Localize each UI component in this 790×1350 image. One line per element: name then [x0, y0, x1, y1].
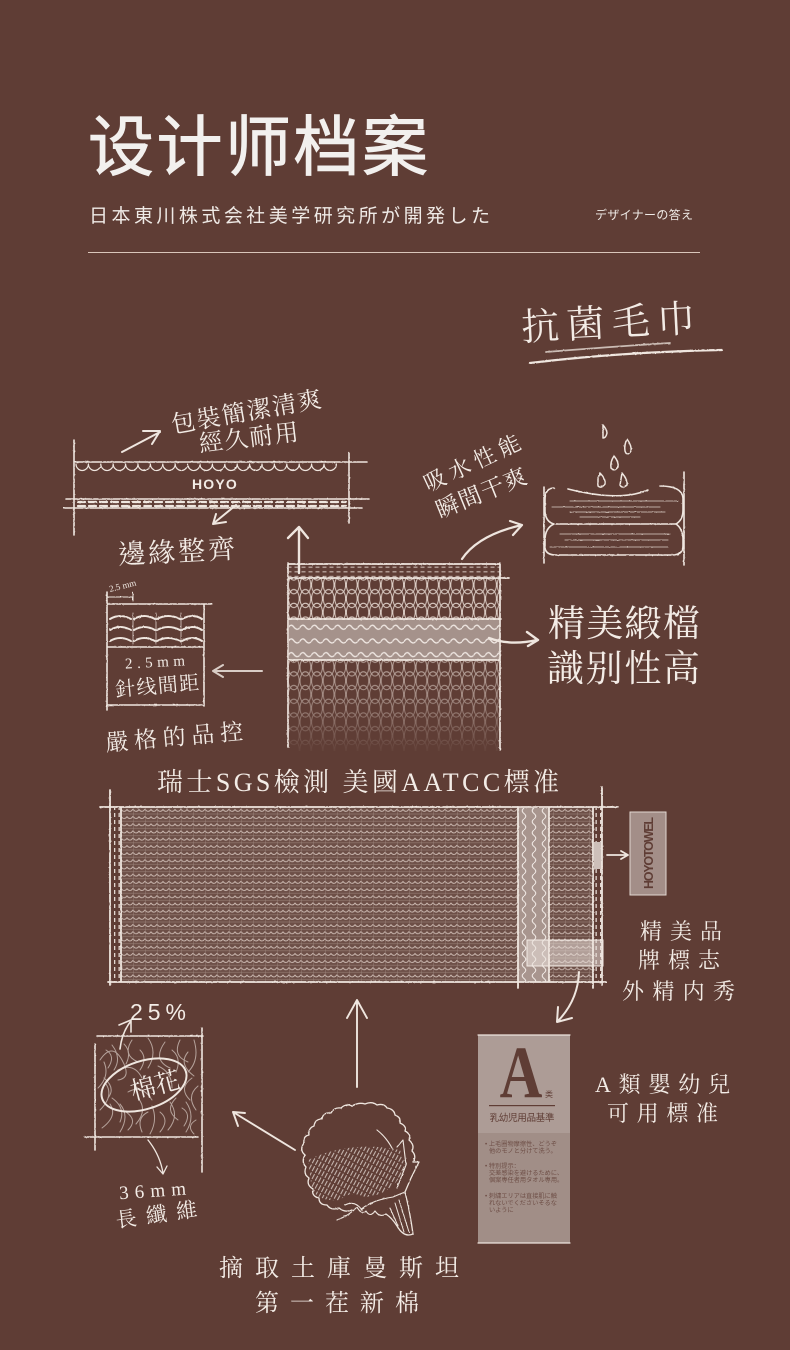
underline swoosh	[530, 343, 722, 363]
panel: stitch spacing	[107, 578, 212, 710]
text: class A note: 可用標准	[607, 1101, 718, 1126]
card notes: れないでくださいそるな	[489, 1200, 557, 1207]
boll outline	[302, 1103, 419, 1235]
text: absorbency note: 瞬間干爽	[432, 464, 531, 523]
arrow: up to strip	[288, 527, 308, 573]
text: packaging note: 包裝簡潔清爽	[169, 386, 324, 439]
arrow: to fibre length	[148, 1140, 167, 1174]
card notes: • 上毛圈物摩擦性、どうぞ	[485, 1140, 557, 1148]
arrow: to packaging note	[122, 431, 160, 452]
towel outlines	[288, 563, 509, 750]
arrow: to absorbency	[462, 521, 522, 559]
heading: antibacterial towel	[520, 298, 722, 363]
woven band	[289, 620, 500, 660]
arrow: to stitch box	[213, 665, 262, 677]
card notes: 個案専任者用タオル専用。	[489, 1176, 563, 1184]
text: brand note: 精美品	[640, 919, 722, 944]
card notes	[485, 1140, 563, 1214]
arrow: to 25%	[119, 1020, 131, 1049]
text: class A note	[595, 1072, 730, 1126]
text: fibre length	[114, 1179, 199, 1233]
band of dots	[289, 565, 500, 578]
panel: packaging strip	[64, 440, 369, 535]
card lower	[478, 1133, 570, 1243]
text: woven band note: 識别性高	[547, 648, 700, 690]
strip drawing	[64, 440, 369, 535]
text: packaging note: 經久耐用	[198, 419, 300, 458]
card notes: • 特別提示：	[485, 1162, 520, 1170]
text: fibre length: 長纖維	[114, 1197, 199, 1233]
arrow: to woven band note	[489, 632, 538, 646]
text: quality control: 嚴格的品控	[104, 719, 244, 756]
text: 25%: 25%	[130, 999, 186, 1025]
text: woven band note	[547, 603, 700, 690]
text: woven band note: 精美緞檔	[548, 603, 700, 645]
cotton label: 棉花	[127, 1066, 183, 1106]
card upper	[478, 1035, 570, 1133]
panel: towel close-up	[288, 563, 509, 751]
water drops	[598, 425, 631, 487]
towel body	[121, 808, 518, 982]
tag: HOYOTOWEL	[630, 812, 666, 895]
outlines	[100, 787, 618, 988]
heading: antibacterial towel: 抗菌毛巾	[520, 298, 696, 350]
text: cotton origin: 第一茬新棉	[255, 1290, 419, 1317]
text: cotton origin	[219, 1255, 459, 1317]
subtitle: 日本東川株式会社美学研究所が開発した	[89, 205, 490, 227]
right towel body	[549, 808, 593, 982]
designer answer note: デザイナーの答え	[595, 207, 693, 222]
card notes: 他のモノと分けて洗う。	[489, 1147, 557, 1155]
woven band base	[518, 808, 549, 982]
icon: cotton boll	[300, 1103, 419, 1235]
card edge lines	[478, 1035, 570, 1243]
woven band waves	[518, 808, 549, 982]
rule	[489, 1105, 555, 1106]
towel label	[594, 842, 602, 869]
card notes: 交差感染を避けるために、	[489, 1169, 563, 1177]
arrow: to tag	[607, 851, 628, 859]
text: brand note: 外精内秀	[622, 979, 735, 1004]
panel: class A card	[478, 1032, 570, 1243]
card notes: いように	[489, 1207, 514, 1214]
arrow: to edge note	[213, 505, 236, 524]
text: class A note: A類嬰幼兒	[595, 1072, 730, 1097]
stitch box	[107, 592, 212, 710]
panel: full towel	[100, 787, 618, 988]
title: 设计师档案	[88, 94, 428, 190]
text: brand note	[622, 919, 735, 1004]
loop texture	[289, 578, 500, 620]
brand patch	[527, 940, 603, 966]
text: brand note: 牌標志	[638, 948, 721, 973]
class mark: 类	[545, 1089, 553, 1100]
text: test standards: 瑞士SGS檢測 美國AATCC標准	[157, 768, 559, 797]
measure label: 2.5 mm	[108, 578, 137, 594]
icon: folded towels with water drops	[544, 425, 684, 565]
text: absorbency note	[420, 430, 531, 523]
text: cotton origin: 摘取土庫曼斯坦	[219, 1255, 459, 1282]
towels	[544, 472, 684, 565]
fading loop texture	[289, 661, 500, 751]
arrow: to class A card	[557, 972, 579, 1022]
stitched ends	[111, 808, 121, 982]
card notes: • 刺繍エリアは直接肌に触	[485, 1192, 557, 1200]
arrow: cotton to fibres	[233, 1112, 295, 1150]
text: edge note: 邊緣整齊	[117, 534, 236, 570]
text: fibre length: 36mm	[118, 1179, 187, 1204]
stitch text: 2.5mm	[125, 653, 186, 673]
panel: cotton fibres	[85, 1028, 203, 1172]
frame	[85, 1028, 203, 1172]
boll shading	[308, 1146, 405, 1200]
text: absorbency note: 吸水性能	[420, 430, 525, 496]
arrow: cotton to towel	[347, 1000, 367, 1087]
header divider	[88, 252, 700, 253]
panel: stitch spacing: 針线間距	[114, 671, 200, 701]
ellipse	[95, 1049, 193, 1121]
letter A: A	[500, 1032, 542, 1114]
HOYO logo: HOYO	[192, 476, 238, 492]
card heading: 乳幼児用品基準	[490, 1112, 555, 1124]
fibre curls	[98, 1038, 198, 1134]
tag: HOYOTOWEL: HOYOTOWEL	[642, 817, 656, 889]
